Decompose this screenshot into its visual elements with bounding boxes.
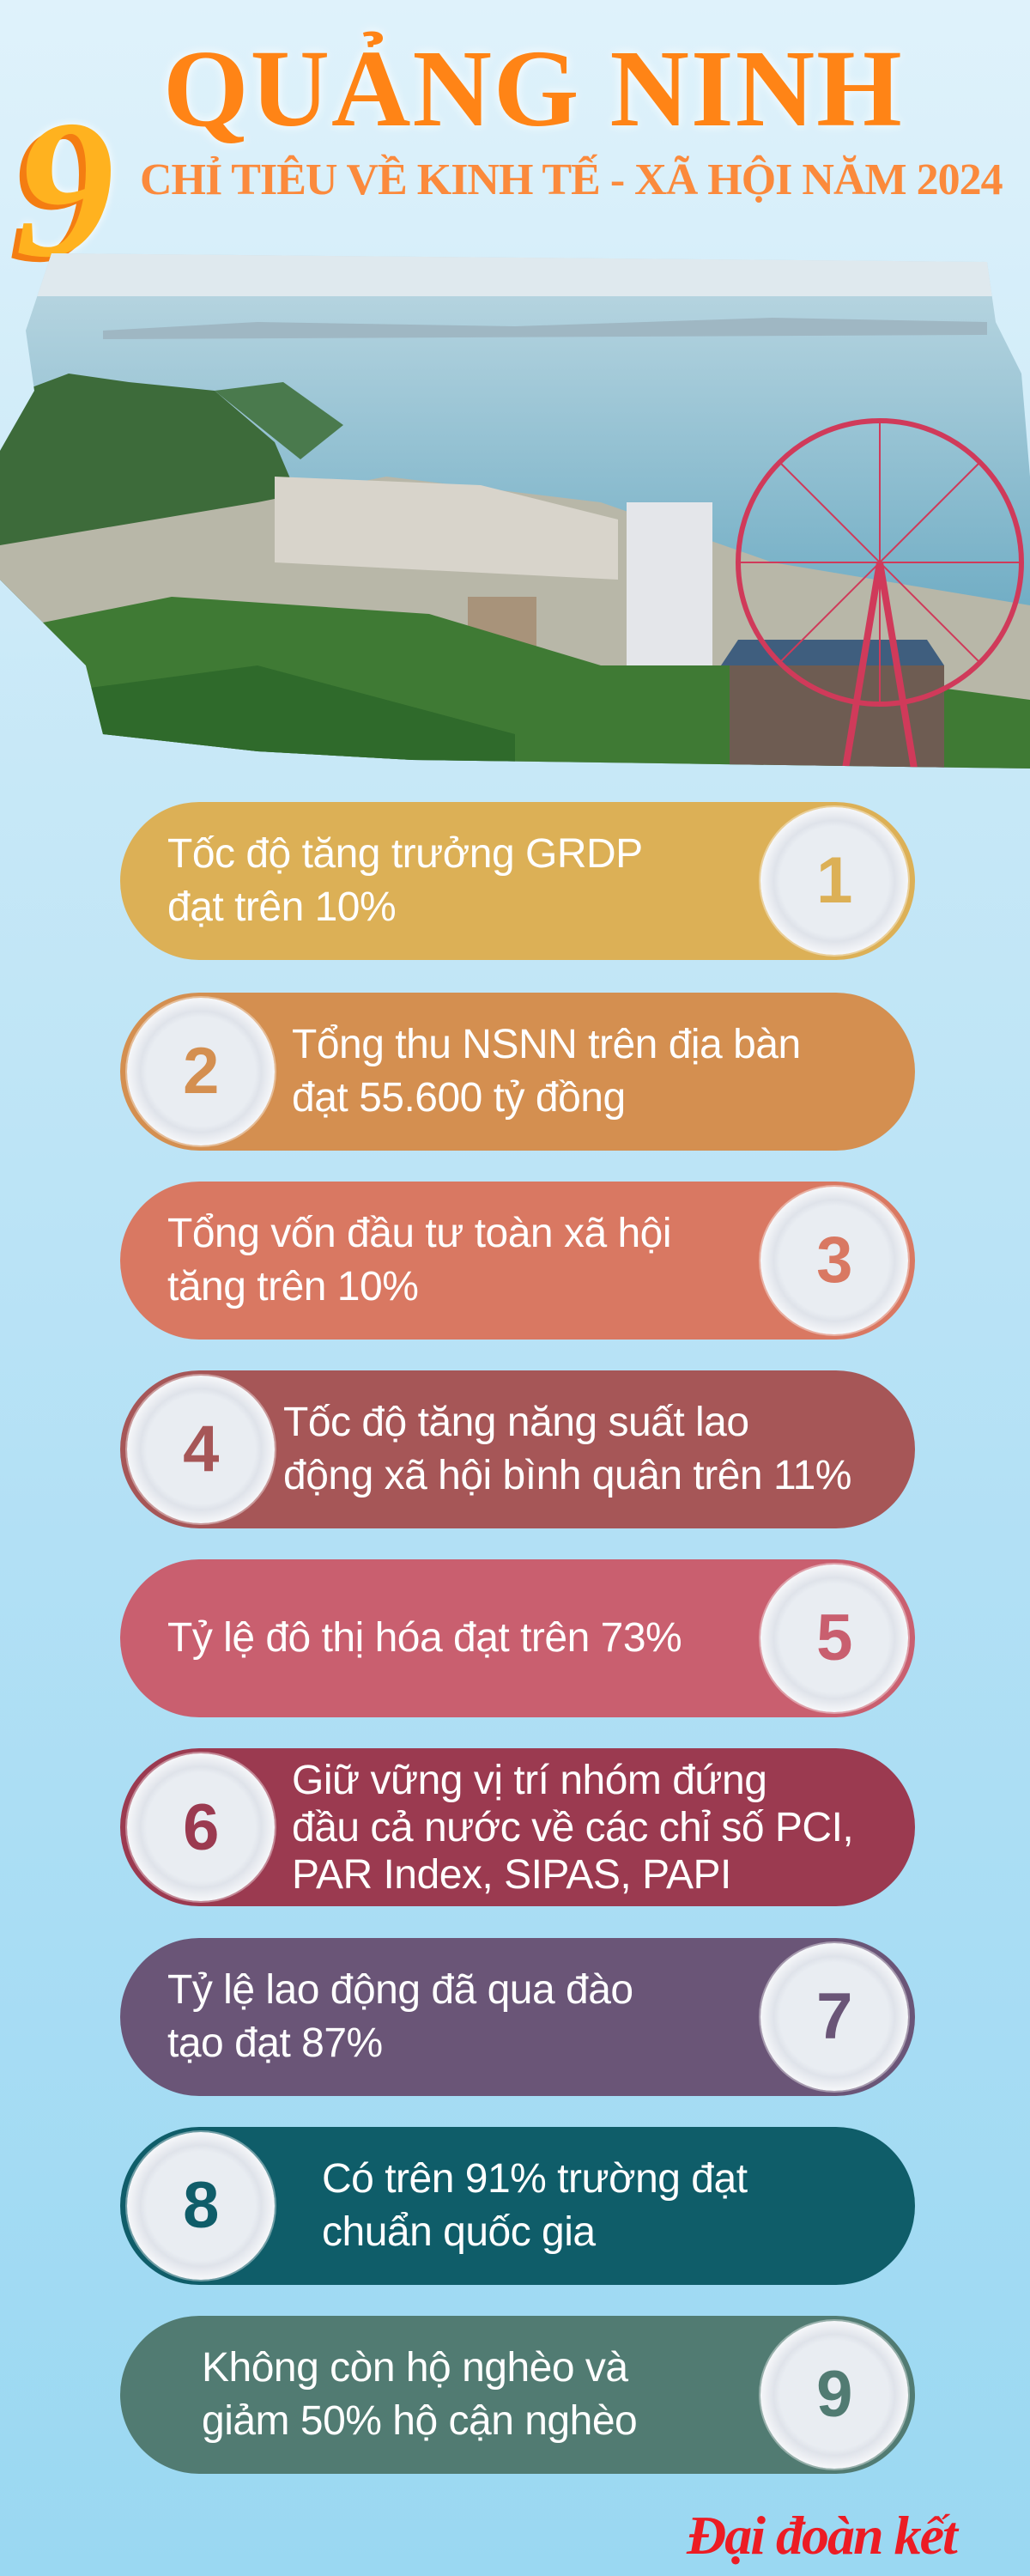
item 9 bbox=[120, 2316, 915, 2474]
item 3 bbox=[120, 1182, 915, 1340]
item 5 bbox=[120, 1559, 915, 1717]
big number 9: 9 bbox=[15, 79, 114, 298]
item 2 bbox=[120, 993, 915, 1151]
item 6: đầu cả nước về các chỉ số PCI, bbox=[292, 1805, 853, 1850]
item 9: 9 bbox=[816, 2358, 852, 2431]
item 5: 5 bbox=[816, 1601, 852, 1674]
item 1 bbox=[120, 802, 915, 960]
item 4: 4 bbox=[183, 1413, 219, 1485]
title: QUẢNG NINH bbox=[163, 27, 904, 149]
item 7 bbox=[120, 1938, 915, 2096]
item 6: 6 bbox=[183, 1791, 219, 1863]
item 8 bbox=[120, 2127, 915, 2285]
item 8: chuẩn quốc gia bbox=[322, 2209, 596, 2255]
item 4 bbox=[120, 1370, 915, 1528]
item 2: đạt 55.600 tỷ đồng bbox=[292, 1075, 626, 1121]
item 7: 7 bbox=[816, 1980, 852, 2053]
item 9: giảm 50% hộ cận nghèo bbox=[202, 2398, 637, 2444]
item 2: 2 bbox=[183, 1035, 219, 1108]
item 6: Giữ vững vị trí nhóm đứng bbox=[292, 1757, 766, 1803]
item 3: tăng trên 10% bbox=[167, 1264, 418, 1309]
item 2: Tổng thu NSNN trên địa bàn bbox=[292, 1022, 801, 1067]
item 4: Tốc độ tăng năng suất lao bbox=[283, 1400, 749, 1445]
item 8: 8 bbox=[183, 2169, 219, 2242]
item 8: Có trên 91% trường đạt bbox=[322, 2156, 748, 2202]
item 1: Tốc độ tăng trưởng GRDP bbox=[167, 831, 643, 877]
item 9: Không còn hộ nghèo và bbox=[202, 2345, 628, 2391]
item 3: 3 bbox=[816, 1224, 852, 1297]
item 1: đạt trên 10% bbox=[167, 884, 396, 930]
item 4: động xã hội bình quân trên 11% bbox=[283, 1453, 851, 1498]
subtitle: CHỈ TIÊU VỀ KINH TẾ - XÃ HỘI NĂM 2024 bbox=[140, 155, 1003, 204]
item 6: PAR Index, SIPAS, PAPI bbox=[292, 1851, 731, 1898]
item 7: tạo đạt 87% bbox=[167, 2020, 383, 2066]
logo: Dai doan ket: Đại đoàn kết bbox=[687, 2505, 956, 2566]
item 6 bbox=[120, 1748, 915, 1906]
item 5: Tỷ lệ đô thị hóa đạt trên 73% bbox=[167, 1615, 682, 1661]
item 1: 1 bbox=[816, 844, 852, 917]
item 7: Tỷ lệ lao động đã qua đào bbox=[167, 1967, 633, 2013]
photo: Ha Long city aerial bbox=[0, 253, 1030, 769]
item 3: Tổng vốn đầu tư toàn xã hội bbox=[167, 1211, 671, 1256]
